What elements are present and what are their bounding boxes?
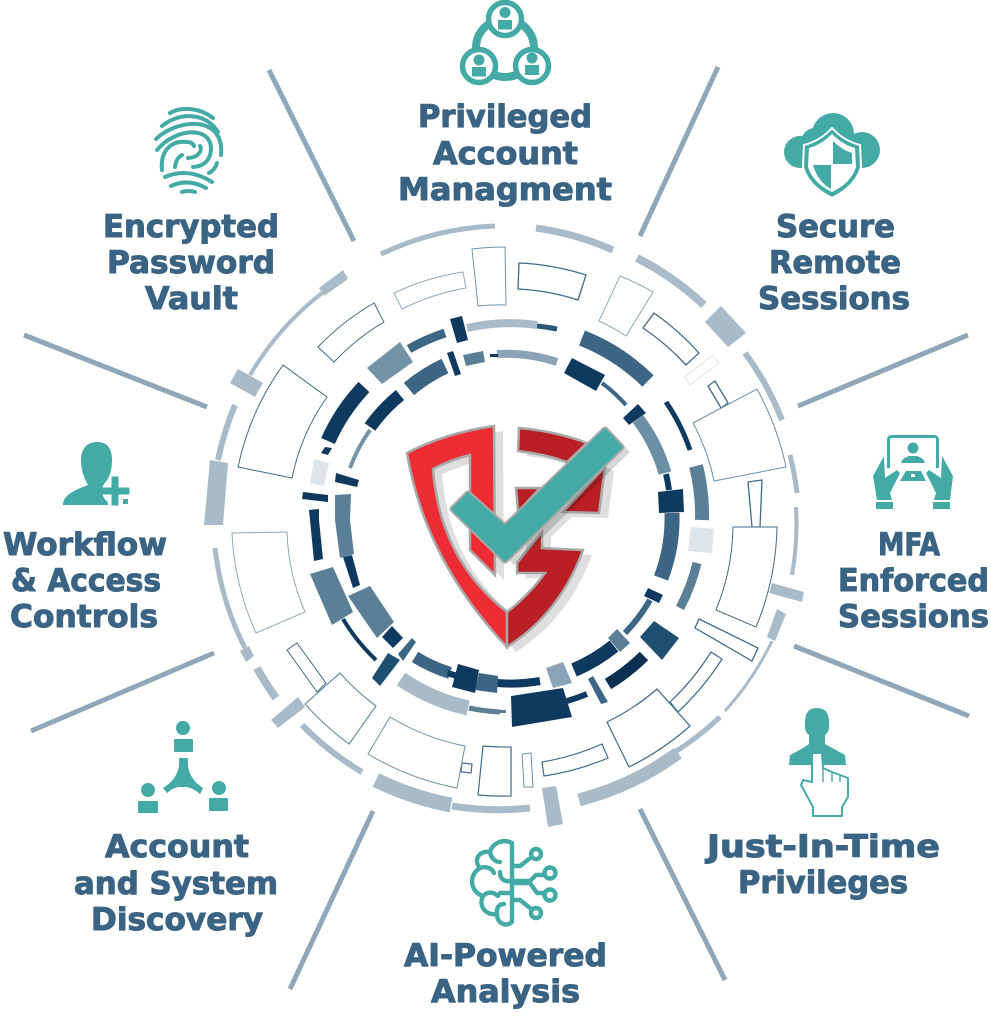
icon: person with pointer hand xyxy=(789,708,848,816)
heading: Privileged Account Managment: Privileged xyxy=(418,99,592,135)
heading: Account and System Discovery: and System xyxy=(74,866,278,902)
heading: Encrypted Password Vault: Password xyxy=(107,245,275,281)
heading: Workflow & Access Controls: Controls xyxy=(10,599,158,635)
icon: brain circuit xyxy=(472,841,556,924)
outlined sector boxes xyxy=(232,247,786,796)
heading: Just-In-Time Privileges: Just-In-Time xyxy=(705,829,940,865)
heading: Privileged Account Managment: Managment xyxy=(398,172,612,208)
heading: AI-Powered Analysis: AI-Powered xyxy=(404,938,607,974)
central shield logo xyxy=(407,426,630,652)
heading: Secure Remote Sessions: Remote xyxy=(769,245,901,281)
heading: Workflow & Access Controls xyxy=(3,527,167,635)
shield left half xyxy=(407,426,507,647)
shield right half xyxy=(507,428,605,647)
icon: fingerprint xyxy=(156,109,221,192)
icon: account and system discovery xyxy=(138,721,228,813)
heading: Secure Remote Sessions xyxy=(758,209,910,317)
check mark xyxy=(453,430,630,565)
heading: Secure Remote Sessions: Sessions xyxy=(758,281,910,317)
icon: privileged account network xyxy=(462,2,548,82)
heading: Encrypted Password Vault: Encrypted xyxy=(103,209,279,245)
icon: tablet held by hands xyxy=(873,436,953,509)
heading: Privileged Account Managment: Account xyxy=(433,136,578,172)
heading: Workflow & Access Controls: & Access xyxy=(11,563,161,599)
heading: Account and System Discovery: Discovery xyxy=(91,902,263,938)
heading: Workflow & Access Controls: Workflow xyxy=(3,527,167,563)
heading: Encrypted Password Vault: Vault xyxy=(145,281,238,317)
heading: Account and System Discovery xyxy=(74,829,278,938)
heading: MFA Enforced Sessions: MFA xyxy=(878,527,940,563)
icon: user with plus xyxy=(63,442,129,505)
heading: Secure Remote Sessions: Secure xyxy=(776,209,895,245)
heading: MFA Enforced Sessions: Enforced xyxy=(838,563,989,599)
icon: cloud shield xyxy=(784,113,880,198)
heading: Privileged Account Managment xyxy=(398,99,612,208)
heading: Just-In-Time Privileges: Privileges xyxy=(738,865,908,901)
heading: Just-In-Time Privileges xyxy=(705,829,940,901)
heading: Encrypted Password Vault xyxy=(103,209,279,317)
outer ring segments xyxy=(204,226,804,827)
heading: MFA Enforced Sessions xyxy=(838,527,989,635)
heading: MFA Enforced Sessions: Sessions xyxy=(838,599,989,635)
inner ring segments xyxy=(302,316,714,727)
heading: Account and System Discovery: Account xyxy=(105,829,249,865)
heading: AI-Powered Analysis: Analysis xyxy=(431,974,580,1010)
heading: AI-Powered Analysis xyxy=(404,938,607,1010)
shield drop shadow xyxy=(416,431,614,652)
